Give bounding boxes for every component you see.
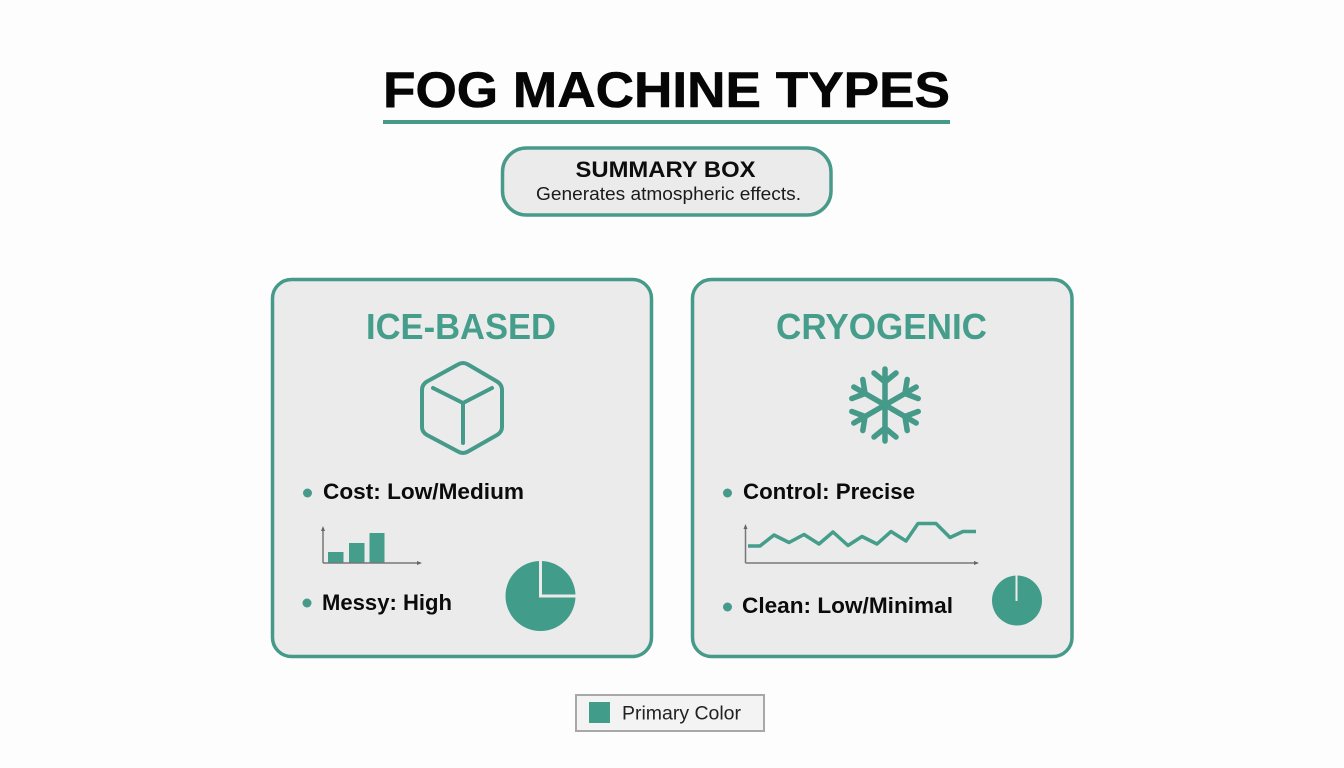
legend swatch	[589, 702, 610, 723]
bullet: messy: Messy: High	[322, 590, 452, 615]
heading: ice-based: ICE-BASED	[366, 306, 556, 347]
title: FOG MACHINE TYPES	[383, 62, 950, 118]
legend	[576, 695, 764, 731]
line chart: control	[744, 524, 979, 565]
summary box	[502, 148, 831, 215]
heading: cryogenic: CRYOGENIC	[776, 306, 987, 347]
icon: ice cube	[422, 363, 502, 453]
bullet: control: Control: Precise	[743, 479, 915, 504]
icon: snowflake	[848, 369, 922, 441]
summary box: Generates atmospheric effects.	[536, 183, 801, 204]
bar chart: cost	[321, 526, 422, 565]
panel: cryogenic	[692, 280, 1072, 656]
bullet: clean: Clean: Low/Minimal	[742, 593, 953, 618]
bullet: cost: Cost: Low/Medium	[323, 479, 524, 504]
legend label: Primary Color	[622, 704, 742, 724]
panel: ice-based	[272, 280, 652, 656]
summary box: SUMMARY BOX	[576, 157, 756, 182]
pie chart: messy	[506, 558, 578, 631]
pie chart: clean	[992, 574, 1042, 626]
